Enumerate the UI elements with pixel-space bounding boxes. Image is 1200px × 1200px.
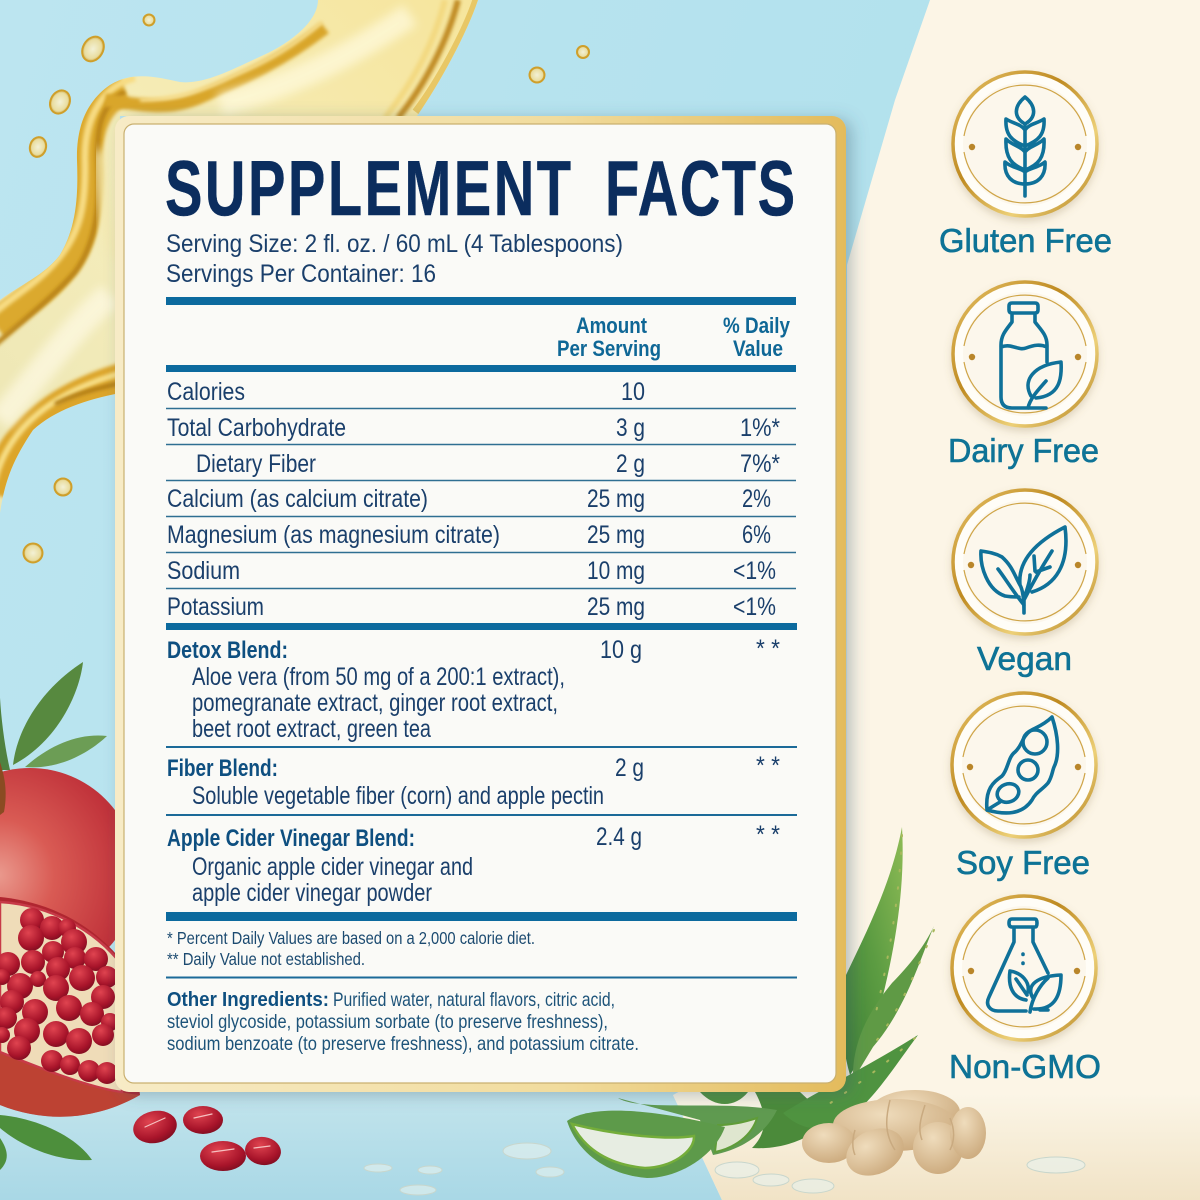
detox blend: pomegranate extract, ginger root extract, xyxy=(192,689,558,717)
nutrient rows: 10 xyxy=(621,378,645,406)
other ingredients xyxy=(167,988,639,1055)
whole pomegranate xyxy=(0,762,137,982)
nutrient rows: 1%* xyxy=(740,414,780,442)
apple cider vinegar blend: * * xyxy=(756,821,780,849)
badge: vegan xyxy=(953,490,1097,634)
column headers: % Daily xyxy=(723,313,790,338)
nutrient rows: Magnesium (as magnesium citrate) xyxy=(167,521,500,549)
nutrient rows: 3 g xyxy=(616,414,645,442)
serving info: Servings Per Container: 16 xyxy=(166,260,436,288)
title xyxy=(165,145,795,232)
serving info xyxy=(166,230,623,288)
nutrient rows: 25 mg xyxy=(587,593,645,621)
label: non-gmo: Non-GMO xyxy=(949,1048,1101,1085)
badge: soy free xyxy=(952,693,1096,837)
badge: dairy free xyxy=(953,282,1097,426)
icon: wheat xyxy=(1005,97,1045,196)
label: soy free: Soy Free xyxy=(956,844,1090,881)
fiber blend: 2 g xyxy=(615,754,644,782)
background: blue floor xyxy=(0,1092,760,1200)
ginger root xyxy=(802,1090,986,1185)
other ingredients: Purified water, natural flavors, citric acid, xyxy=(333,989,615,1011)
detox blend xyxy=(167,635,780,743)
footnotes: * Percent Daily Values are based on a 2,000 calorie diet. xyxy=(167,928,535,948)
nutrient rows: 2% xyxy=(742,485,771,513)
supplement facts card xyxy=(115,116,846,1092)
oil droplets xyxy=(24,14,589,562)
bottom leaves xyxy=(0,1115,92,1170)
apple cider vinegar blend: apple cider vinegar powder xyxy=(192,879,432,907)
footnotes: ** Daily Value not established. xyxy=(167,949,365,969)
pomegranate leaves xyxy=(0,662,107,770)
pomegranate arils xyxy=(130,1106,283,1171)
other ingredients: Other Ingredients: xyxy=(167,988,329,1011)
nutrient rows: Calcium (as calcium citrate) xyxy=(167,485,428,513)
nutrient rows: 25 mg xyxy=(587,485,645,513)
icon: milk bottle with leaf xyxy=(1001,303,1061,408)
badge: gluten free xyxy=(953,72,1097,216)
other ingredients: steviol glycoside, potassium sorbate (to preserve freshness), xyxy=(167,1011,608,1033)
nutrient rows: 25 mg xyxy=(587,521,645,549)
badge: non-gmo xyxy=(952,896,1096,1040)
detox blend: Aloe vera (from 50 mg of a 200:1 extract), xyxy=(192,663,565,691)
serving info: Serving Size: 2 fl. oz. / 60 mL (4 Tablespoons) xyxy=(166,230,623,258)
nutrient rows: 2 g xyxy=(616,450,645,478)
column headers xyxy=(557,313,790,361)
column headers: Amount xyxy=(576,313,647,338)
card face xyxy=(124,124,836,1083)
footnotes xyxy=(167,928,535,969)
apple cider vinegar blend: Organic apple cider vinegar and xyxy=(192,853,473,881)
nutrient rows: Total Carbohydrate xyxy=(167,414,346,442)
fiber blend: Soluble vegetable fiber (corn) and apple pectin xyxy=(192,782,604,810)
column headers: Value xyxy=(733,336,783,361)
detox blend: Detox Blend: xyxy=(167,637,288,664)
nutrient rows: Sodium xyxy=(167,557,240,585)
other ingredients: sodium benzoate (to preserve freshness), and potassium citrate. xyxy=(167,1033,639,1055)
aloe vera plant xyxy=(567,827,934,1178)
nutrient rows: Calories xyxy=(167,378,245,406)
nutrient rows: 10 mg xyxy=(587,557,645,585)
nutrient rows: <1% xyxy=(733,557,776,585)
detox blend: beet root extract, green tea xyxy=(192,715,431,743)
icon: soybean pod xyxy=(987,717,1058,813)
nutrient rows: 6% xyxy=(742,521,771,549)
fiber blend: Fiber Blend: xyxy=(167,755,278,782)
title: SUPPLEMENT xyxy=(165,145,571,232)
nutrient rows: 7%* xyxy=(740,450,780,478)
icon: flask with leaves xyxy=(988,919,1061,1012)
apple cider vinegar blend xyxy=(167,821,780,907)
label: dairy free: Dairy Free xyxy=(948,432,1099,469)
apple cider vinegar blend: 2.4 g xyxy=(596,823,642,851)
nutrient rows xyxy=(166,378,796,621)
icon: two leaves xyxy=(981,527,1066,613)
label: gluten free: Gluten Free xyxy=(939,222,1112,259)
cut pomegranate half xyxy=(0,897,140,1117)
icon: beans xyxy=(995,730,1047,805)
nutrient rows: <1% xyxy=(733,593,776,621)
background: cream panel xyxy=(673,0,1200,1200)
label: vegan: Vegan xyxy=(977,640,1072,677)
column headers: Per Serving xyxy=(557,336,661,361)
water drops xyxy=(364,1143,1085,1195)
fiber blend: * * xyxy=(756,752,780,780)
golden oil splash xyxy=(0,0,480,520)
card frame xyxy=(115,116,846,1092)
detox blend: 10 g xyxy=(600,636,642,664)
apple cider vinegar blend: Apple Cider Vinegar Blend: xyxy=(167,825,415,852)
background: sand floor xyxy=(673,1095,1200,1200)
nutrient rows: Dietary Fiber xyxy=(196,450,316,478)
title: FACTS xyxy=(605,145,795,232)
nutrient rows: Potassium xyxy=(167,593,264,621)
detox blend: * * xyxy=(756,635,780,663)
fiber blend xyxy=(167,752,780,810)
